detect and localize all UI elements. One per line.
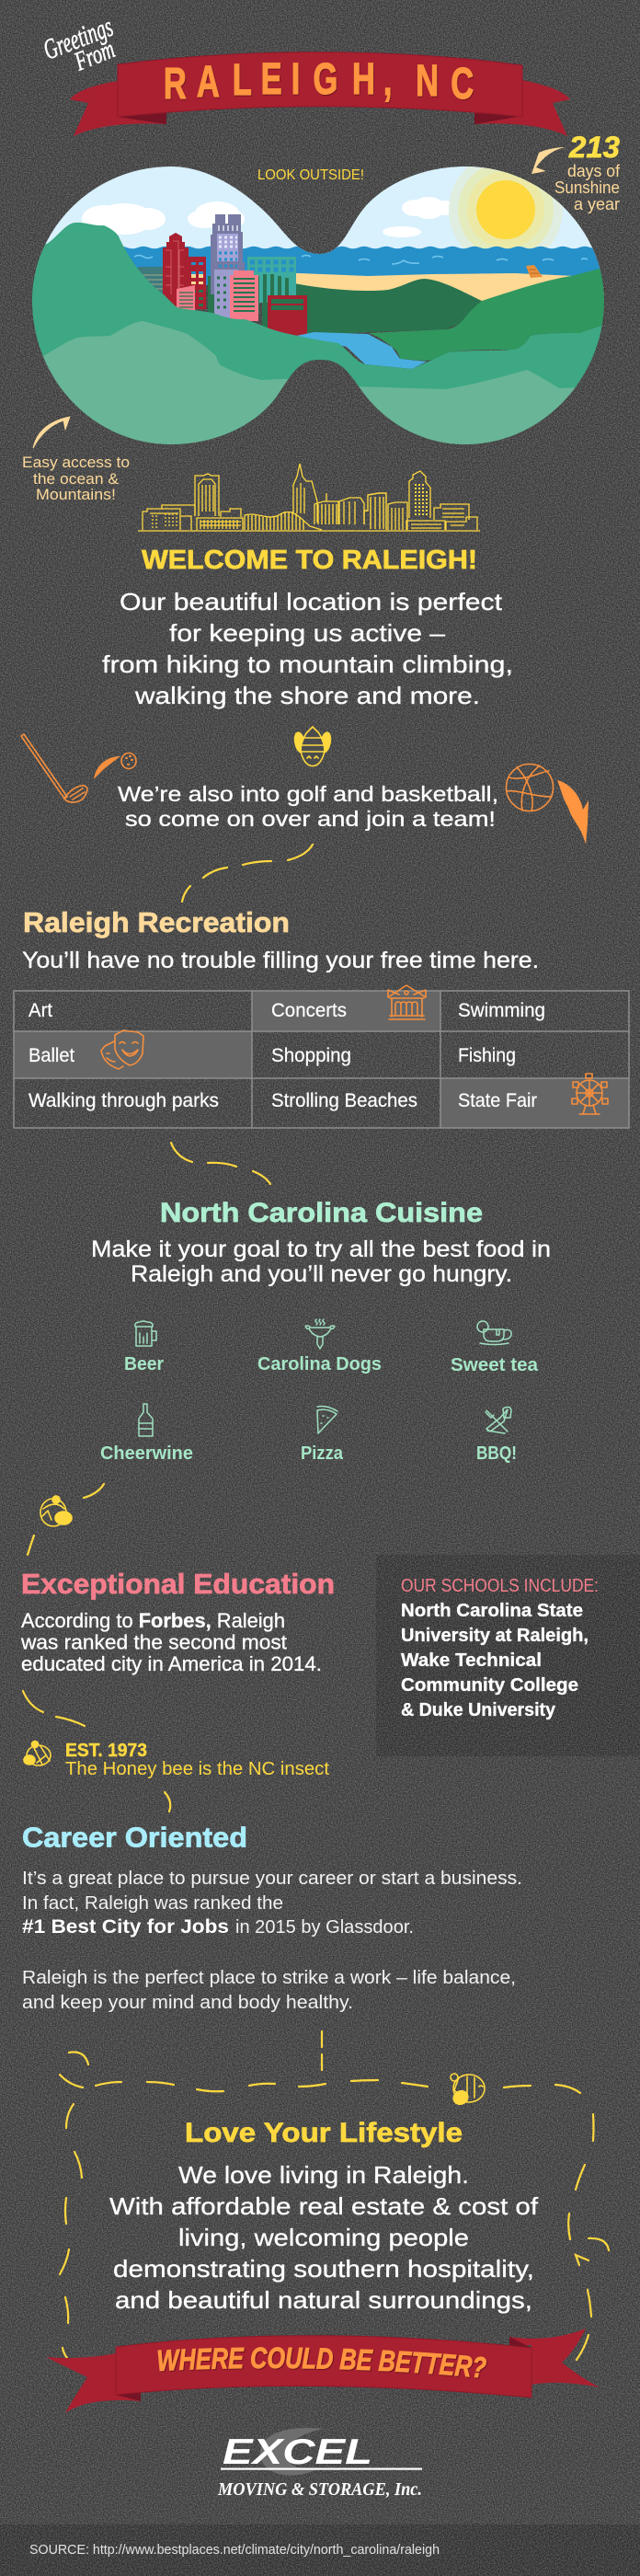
top ribbon banner (70, 52, 570, 136)
binoculars scene (28, 153, 612, 451)
boat (526, 265, 543, 278)
sand beach (296, 272, 604, 302)
lifestyle paragraph (109, 2161, 539, 2314)
food item: bbq (476, 1407, 517, 1464)
sunshine callout (531, 131, 621, 213)
access callout: Mountains! (36, 486, 116, 503)
activities table: Fishing (458, 1045, 516, 1066)
sports paragraph: so come on over and join a team! (125, 807, 496, 831)
schools panel: Wake Technical (401, 1650, 542, 1671)
sunshine callout: 213 (568, 131, 620, 164)
career paragraph: and keep your mind and body healthy. (22, 1993, 353, 2013)
education heading: Exceptional Education (21, 1568, 335, 1600)
education paragraph: educated city in America in 2014. (21, 1652, 322, 1675)
food item: cheerwine: Cheerwine (100, 1443, 193, 1464)
food item: sweet tea (451, 1321, 539, 1375)
sea (28, 247, 612, 285)
schools panel: OUR SCHOOLS INCLUDE: (401, 1576, 599, 1596)
schools panel: University at Raleigh, (401, 1626, 589, 1646)
career paragraph: Raleigh is the perfect place to strike a work – life balance, (22, 1968, 516, 1988)
icon: ferris wheel (572, 1074, 608, 1114)
icon: bee flying (40, 1496, 72, 1526)
light green foreground (42, 321, 576, 444)
recreation intro: You’ll have no trouble filling your free time here. (22, 948, 539, 973)
icon: honey bee fact (24, 1741, 51, 1765)
teal building (247, 257, 296, 313)
greetings from script (39, 10, 119, 77)
dashed trail to recreation (182, 845, 313, 902)
access callout (22, 417, 130, 503)
activities table: Art (29, 1000, 52, 1021)
sports paragraph (118, 782, 498, 831)
activities table: State Fair (458, 1090, 537, 1111)
food item: carolina dogs: Carolina Dogs (257, 1354, 382, 1374)
intro paragraph: from hiking to mountain climbing, (102, 650, 513, 678)
closing ribbon banner (46, 2329, 600, 2413)
pink building (230, 270, 258, 321)
career heading: Career Oriented (22, 1822, 247, 1853)
career paragraph: #1 Best City for Jobs (22, 1916, 229, 1938)
activities table: Strolling Beaches (271, 1090, 417, 1111)
clouds (82, 197, 455, 237)
red block (268, 295, 307, 336)
bee fact text: EST. 1973 (65, 1741, 147, 1761)
city skyline outline (138, 464, 480, 531)
mid green hill (368, 267, 607, 361)
cuisine intro (91, 1236, 551, 1287)
intro paragraph: for keeping us active – (169, 619, 446, 647)
city buildings (138, 214, 307, 336)
look outside label: LOOK OUTSIDE! (257, 167, 364, 183)
cuisine intro: Raleigh and you’ll never go hungry. (131, 1261, 512, 1287)
source footer: SOURCE: http://www.bestplaces.net/climate/city/north_carolina/raleigh (29, 2543, 440, 2558)
bee fact text (65, 1741, 329, 1779)
activities table (14, 991, 629, 1128)
sunshine callout: Sunshine (554, 178, 620, 197)
food item: bbq: BBQ! (476, 1443, 517, 1464)
excel logo: MOVING & STORAGE, Inc. (217, 2479, 422, 2500)
purple tower (211, 214, 245, 318)
lifestyle paragraph: and beautiful natural surroundings, (115, 2286, 532, 2314)
career paragraph: It’s a great place to pursue your career or start a business. (22, 1869, 522, 1889)
food item: cheerwine (100, 1404, 193, 1464)
food item: sweet tea: Sweet tea (451, 1355, 539, 1375)
food item: pizza (301, 1407, 344, 1464)
lifestyle paragraph: We love living in Raleigh. (178, 2161, 469, 2189)
education paragraph: According to Forbes, Raleigh (21, 1609, 285, 1632)
sunshine callout: days of (567, 162, 621, 180)
lifestyle paragraph: With affordable real estate & cost of (109, 2192, 539, 2220)
food item: carolina dogs (257, 1319, 382, 1374)
schools panel: North Carolina State (401, 1601, 583, 1621)
icon: bee facing down (293, 727, 332, 765)
sky (28, 161, 611, 271)
activities table: Swimming (458, 1000, 545, 1021)
sports paragraph: We’re also into golf and basketball, (118, 782, 498, 806)
career paragraph: in 2015 by Glassdoor. (235, 1917, 414, 1938)
sunshine callout: a year (574, 195, 620, 213)
access callout: Easy access to (22, 454, 130, 471)
red tower (163, 233, 206, 311)
lifestyle paragraph: living, welcoming people (178, 2224, 469, 2251)
excel logo (217, 2428, 422, 2500)
banner title: RALEIGH, NC (164, 53, 474, 108)
career paragraph: In fact, Raleigh was ranked the (22, 1893, 283, 1914)
lifestyle heading: Love Your Lifestyle (185, 2118, 463, 2148)
activities table: Concerts (271, 1000, 347, 1021)
food item: beer: Beer (124, 1354, 164, 1374)
dashed frame (60, 2031, 609, 2360)
intro paragraph (102, 588, 513, 709)
welcome heading: WELCOME TO RALEIGH! (142, 546, 477, 575)
greetings from script: From (70, 34, 119, 77)
recreation heading: Raleigh Recreation (23, 906, 290, 938)
career paragraph (22, 1869, 522, 2013)
arrow to sun (531, 147, 566, 174)
education paragraph (20, 1609, 322, 1675)
schools panel: & Duke University (401, 1700, 556, 1720)
sun (449, 167, 563, 248)
activities table: Shopping (271, 1045, 351, 1066)
icon: golf club and ball (21, 734, 136, 802)
arrow to lens (33, 417, 70, 448)
dark green mid block (208, 276, 214, 314)
activities table: Walking through parks (29, 1090, 219, 1111)
dark green hill (262, 276, 482, 337)
icon: bee on frame (451, 2074, 485, 2107)
intro paragraph: walking the shore and more. (134, 682, 480, 709)
access callout: the ocean & (33, 470, 120, 488)
intro paragraph: Our beautiful location is perfect (120, 588, 503, 615)
excel logo: EXCEL (223, 2432, 372, 2472)
river (296, 332, 427, 369)
schools panel: Community College (401, 1675, 578, 1696)
dashed trail to cuisine (171, 1143, 270, 1184)
activities table: Ballet (29, 1045, 74, 1066)
teal mountain foreground (28, 223, 607, 451)
icon: basketball with flame (506, 764, 589, 845)
cuisine heading: North Carolina Cuisine (160, 1198, 483, 1228)
dashed trail to education (28, 1484, 104, 1555)
dash to career (165, 1792, 170, 1811)
icon: museum (388, 985, 426, 1019)
dashed trail to bee fact (23, 1691, 85, 1726)
teal-grey back block (138, 267, 163, 294)
lifestyle paragraph: demonstrating southern hospitality, (113, 2255, 534, 2283)
icon: theatre masks (101, 1030, 143, 1069)
cuisine intro: Make it your goal to try all the best food in (91, 1236, 551, 1262)
closing question: WHERE COULD BE BETTER? (158, 2347, 487, 2379)
food item: beer (124, 1321, 164, 1374)
bee fact text: The Honey bee is the NC insect (65, 1759, 329, 1779)
education paragraph: was ranked the second most (20, 1630, 287, 1654)
schools panel (401, 1576, 599, 1720)
food item: pizza: Pizza (301, 1443, 344, 1464)
